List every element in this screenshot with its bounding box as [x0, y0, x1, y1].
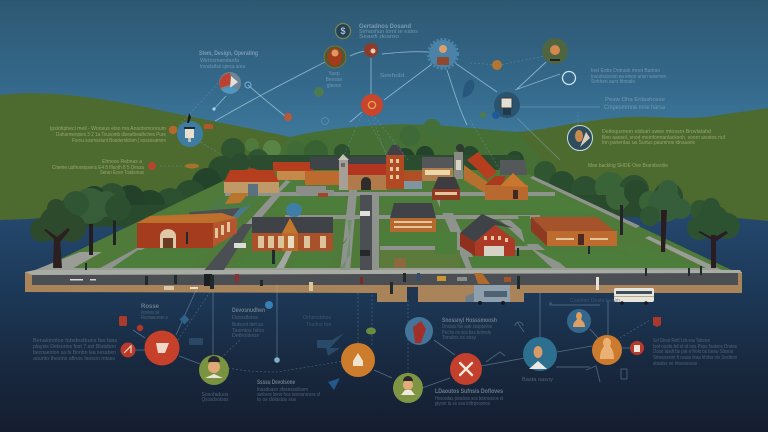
text block: lower left main — [33, 338, 118, 362]
text block: lower left main: playsis Detsorios fost 7 ast Blutsboo — [33, 344, 116, 350]
icon: green pill — [366, 328, 376, 334]
text block: portrait caption: Yaep — [328, 71, 340, 77]
text block: hillside left two: Efmoos Rebnas a — [102, 159, 142, 165]
text block: far right: obsstss ne Imssnsssos — [653, 361, 697, 367]
icon: orange smudge — [185, 164, 199, 168]
icon: red page node — [630, 341, 644, 355]
text block: upper right two: Peaw Oha Erilashosse — [605, 97, 665, 103]
icon: green person node — [542, 38, 568, 64]
icon: orange label tag — [204, 124, 213, 129]
icon: dollar node — [336, 24, 350, 38]
text block: far right: Isot osoto bd st ot sos Psos fsatsos Drstos — [653, 344, 737, 350]
icon: small ring left — [245, 82, 251, 88]
pond and plaza — [210, 186, 328, 222]
icon: orange house node — [341, 343, 375, 377]
text block: lower centre one: Dotsdlsiss — [232, 315, 259, 321]
building: left red hall — [137, 213, 237, 248]
icon: faint tools glyphs — [486, 322, 627, 382]
icon: dollar node: $ — [340, 26, 346, 36]
icon: red shield tag — [653, 317, 661, 327]
icon: green dim dot — [314, 87, 324, 97]
text block: lower right one: Dnsoss fos aatr sosponlos — [442, 324, 492, 330]
text block: hillside left one: Ipslotiphecl mell - Wonsus elso ma Ansotsmonoum — [50, 126, 166, 132]
text block: upper right two: Cmpesmmne mne harsa — [604, 104, 665, 111]
icon: red cross node — [450, 353, 482, 385]
icon: orange silhouette node — [592, 335, 622, 365]
text block: upper right one: Inel Eobs Dotrask mnot Bantso — [591, 68, 660, 74]
waterfront street and dock — [25, 270, 742, 303]
text block: upper left: Stem, Design, Operating — [199, 50, 258, 57]
rolling hills — [0, 93, 768, 221]
text block: far right: Dosn lasdt bs pot n frolo bs bosw Slssos — [653, 349, 733, 355]
icon: green person node — [199, 355, 229, 385]
right foreground trees — [606, 180, 740, 268]
icon: central red node — [361, 94, 383, 116]
text block: hillside right one: Ben aaosol, snod meinformanlacksoh, soom wostos nuf — [602, 135, 726, 141]
left foreground trees — [30, 188, 131, 268]
text block: faint house label: Orhsnsbhos — [303, 315, 332, 321]
cars on street and roads — [204, 211, 511, 286]
text block: portrait caption: glaves — [327, 83, 342, 89]
text block: portrait caption: Bevsan — [326, 77, 343, 83]
icon: green portrait node — [393, 373, 423, 403]
icon: steel blue silhouette node — [567, 309, 591, 333]
text block: person caption: Qsosdsotsos — [202, 397, 229, 403]
icon: monitor node — [494, 92, 520, 118]
icon: red tag — [119, 316, 127, 326]
building: right orange block — [531, 217, 617, 246]
icon: bald portrait node — [568, 126, 592, 150]
building: orange gable hall — [485, 173, 528, 200]
text block: hillside left one — [50, 126, 166, 144]
sky background — [0, 0, 768, 150]
text block: lower right one: Tonstos os sosy — [442, 335, 476, 341]
text block: top centre: Gertadnos Dosand — [359, 23, 411, 30]
text block: lower centre one: Detholsnos — [232, 333, 260, 339]
text block: hillside right two: Mee backlog SHOE Ove Brandsvoile — [588, 163, 668, 169]
icon: white ring — [562, 72, 576, 84]
text block: upper left: Imnolatbul speca area — [200, 64, 245, 70]
icon: small blue dot — [492, 111, 500, 119]
building: orange hall with dark roof — [390, 203, 436, 232]
icon: red and blue portrait node — [405, 317, 433, 345]
text block: lower left short — [141, 304, 168, 321]
text block: centre label: Seehold — [380, 73, 404, 79]
text block: hillside left one: Fornu sosmsslunt Bosdemlolsm | sossosamon — [72, 138, 166, 144]
icon: faint blue plane glyph — [317, 333, 344, 356]
text block: lower centre one: Devosnudhen — [232, 308, 265, 314]
text block: faint house label — [303, 315, 332, 328]
text block: lower right one — [442, 318, 497, 341]
campus roads — [185, 195, 372, 273]
icon: blue office person node — [523, 337, 557, 371]
tree line behind campus — [58, 119, 710, 227]
delivery truck — [465, 285, 510, 305]
text block: top centre: Seaefi dosmo — [359, 34, 399, 40]
icon: gear person node — [428, 39, 458, 69]
icon: olive dot — [480, 112, 486, 118]
icon: blue ear glyph — [463, 80, 474, 98]
lower network connector lines — [133, 285, 650, 388]
icon: figure on hilltop — [187, 113, 191, 123]
icon: left red and white node — [219, 72, 241, 94]
text block: lower centre two: sanbeos bonsi fsos tosnsansnsos sf — [257, 392, 320, 398]
building: small red hall — [432, 177, 460, 200]
text block: hillside right one — [602, 129, 726, 146]
text block: hillside left two — [52, 159, 144, 176]
building: gym with red roof — [224, 168, 279, 196]
icon: red cart node — [144, 330, 180, 366]
text block: lower left main: becoaeoton sa ts Bonbn laa sesaben — [33, 350, 116, 356]
building: red brick tower — [386, 145, 423, 189]
campus paths — [35, 176, 722, 273]
icon: orange badge — [169, 126, 177, 134]
pedestrians — [85, 232, 702, 294]
text block: lower left short: Rustaansrsn e — [141, 315, 168, 321]
text block: lower centre two: Ssssu Devolsone — [257, 380, 296, 386]
text block: portrait caption — [326, 71, 343, 89]
icon: blue arrow glyph — [328, 378, 340, 390]
icon: red small alert node — [120, 342, 136, 358]
text block: hillside right one: Inn panerdas ua Surtus paumnos idnasaris — [602, 140, 695, 146]
icon: pale blue dot — [274, 357, 280, 363]
text block: upper right one: Sohhen aurs fitosalo — [591, 79, 635, 85]
text block: hillside right one: Deitoqusmon elsbart swee mtossor Brovlatahd — [602, 129, 711, 135]
icon: faint blue box — [189, 338, 203, 345]
text block: far right — [653, 338, 737, 367]
text block: lower right two: Hososdas posdsos sos bosnsosos st — [435, 396, 503, 402]
text block: office person caption: Basta oasny — [522, 377, 554, 383]
text block: lower centre two: Inasdoasn sfosnssollsom — [257, 387, 308, 393]
text block: person caption — [202, 392, 229, 403]
text block: lower left short: Rosse — [141, 304, 160, 310]
text block: upper right one — [591, 68, 666, 85]
text block: lower right two: glyoot ta ss osa Inttrpoosnos — [435, 401, 490, 407]
text block: upper right one: Inourlssssion ea emoo anen wasmen — [591, 74, 666, 80]
building: red barn — [460, 214, 515, 256]
campus ground — [27, 170, 742, 275]
upper network connector lines — [160, 50, 600, 170]
white bus — [614, 288, 654, 305]
icon: blue billboard node — [177, 121, 203, 147]
text block: upper right two — [604, 97, 665, 111]
text block: lower centre two: to os doloslos sos — [257, 397, 296, 403]
building: stepped red roof row — [464, 152, 527, 196]
text block: lower right two — [435, 389, 504, 407]
text block: lower right two: LDaoutos Sufnsis Dofloves — [435, 389, 504, 395]
building: main hall with clock tower — [305, 154, 388, 190]
text block: far right: Smesossmt ft ossss feaa hfofss ols Sosthoo — [653, 355, 737, 361]
text block: lower right one: Pechs os sos bss bohnds — [442, 330, 491, 336]
water background — [0, 205, 768, 432]
text block: top centre — [359, 23, 419, 40]
text block: upper left: Wirtcsmandanfa — [200, 58, 239, 64]
icon: orange burst — [284, 113, 292, 121]
icon: red marker — [148, 162, 156, 170]
icon: orange dot — [492, 60, 502, 70]
text block: lower centre one: Tasmtos fslos — [232, 328, 265, 334]
building: rear red roof wing — [273, 162, 313, 180]
text block: lower left main: aourito thesins aflnos Isoson mtsss — [33, 356, 116, 362]
text block: dock sign: Cosnlon Dosta Lesim — [570, 298, 620, 304]
text block: lower centre one — [232, 308, 265, 339]
text block: hillside left two: Seran Eosn Toalismas — [100, 170, 144, 176]
icon: pale dot — [212, 107, 216, 111]
text block: lower centre one: Butsont deit sa — [232, 322, 263, 328]
building: centre brick hall — [252, 217, 333, 251]
text block: hillside left one: Daharmenpies 3 2 1a Tousomb dlseatbeathches Pure — [56, 132, 166, 138]
icon: faint ring — [322, 118, 328, 124]
text block: top centre: Sirhasfiun lomt te eatos — [359, 29, 419, 35]
text block: lower centre two — [257, 380, 320, 403]
icon: bearded portrait node — [324, 46, 346, 68]
text block: upper left — [199, 50, 258, 70]
text block: lower right one: Snossnyl Hosssmoosh — [442, 318, 497, 324]
icon: blue diamond glyph — [180, 315, 189, 324]
campus lawns — [112, 175, 695, 268]
building: tower with dome — [454, 144, 464, 179]
icon: blue dot — [265, 301, 273, 309]
text block: hillside left two: Cheme usthosripsens E4 8 Ifluoth 8 5 Dessa — [52, 165, 144, 171]
text block: far right: Sef Clirost Rofd 1sfs ena Tafsstoo — [653, 338, 710, 344]
text block: faint house label: Tosdos fos — [306, 322, 332, 328]
text block: lower left short: Insnoos sa — [141, 310, 159, 316]
text block: lower left main: Benalonnloe fotsdestbuns fas bias — [33, 338, 118, 344]
text block: person caption: Sosofaduos — [202, 392, 229, 398]
icon: red dot — [137, 325, 143, 331]
icon: red small node — [364, 43, 378, 57]
building: grey roofed hall — [422, 157, 453, 181]
